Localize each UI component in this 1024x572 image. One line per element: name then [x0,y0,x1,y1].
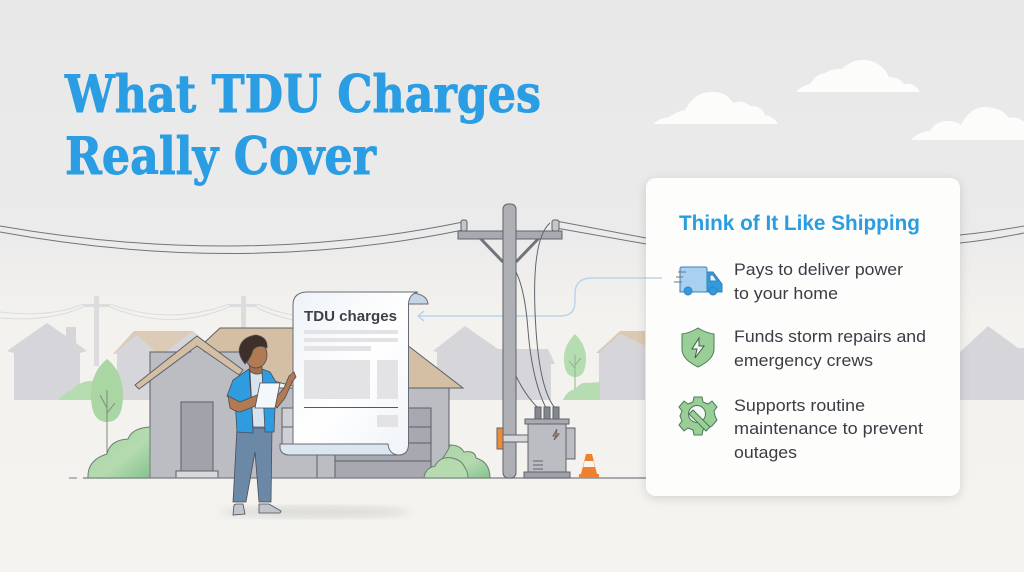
arrow: charges callout connector [418,278,650,321]
info card [646,178,960,496]
clouds [653,60,1024,140]
shoes [233,504,281,515]
distant right tree [563,334,600,400]
background scene: distant houses and poles [0,296,1024,400]
item: maintenance [679,397,923,462]
main wires [0,221,1024,254]
item: delivery: Pays to deliver power [734,261,904,279]
item: delivery: to your home [734,285,838,303]
ground line [83,477,660,479]
item: storm repairs: emergency crews [734,352,873,370]
icon: gear and wrench [679,397,717,435]
item: storm repairs: Funds storm repairs and [734,328,926,346]
neck and face [249,362,262,374]
bushes [88,427,490,478]
hair [239,335,267,364]
icon: shield [682,328,714,367]
item: maintenance: outages [734,444,797,462]
door [181,402,213,471]
traffic cone [579,454,599,478]
icon: truck [674,267,722,295]
document: TDU charges [280,292,428,455]
shirt [227,369,253,433]
person [227,335,296,515]
item: delivery [674,261,904,303]
connector segment on card [646,277,662,279]
left tree [91,359,123,455]
document heading: TDU charges [304,309,397,325]
card heading: Think of It Like Shipping [679,212,920,235]
legs [233,428,272,502]
title: Really Cover [65,127,377,187]
utility pole [458,204,562,478]
title: What TDU Charges [64,65,541,125]
document lines [304,330,398,427]
main house [135,328,463,478]
ground shadow [220,506,410,518]
item: maintenance: maintenance to prevent [734,420,923,438]
transformer [497,407,575,478]
tablet [255,383,280,408]
item: maintenance: Supports routine [734,397,865,415]
undershirt [250,372,266,427]
title [64,65,541,187]
raised arm [272,372,296,408]
forearm [228,393,268,412]
item: storm repairs [682,328,926,370]
